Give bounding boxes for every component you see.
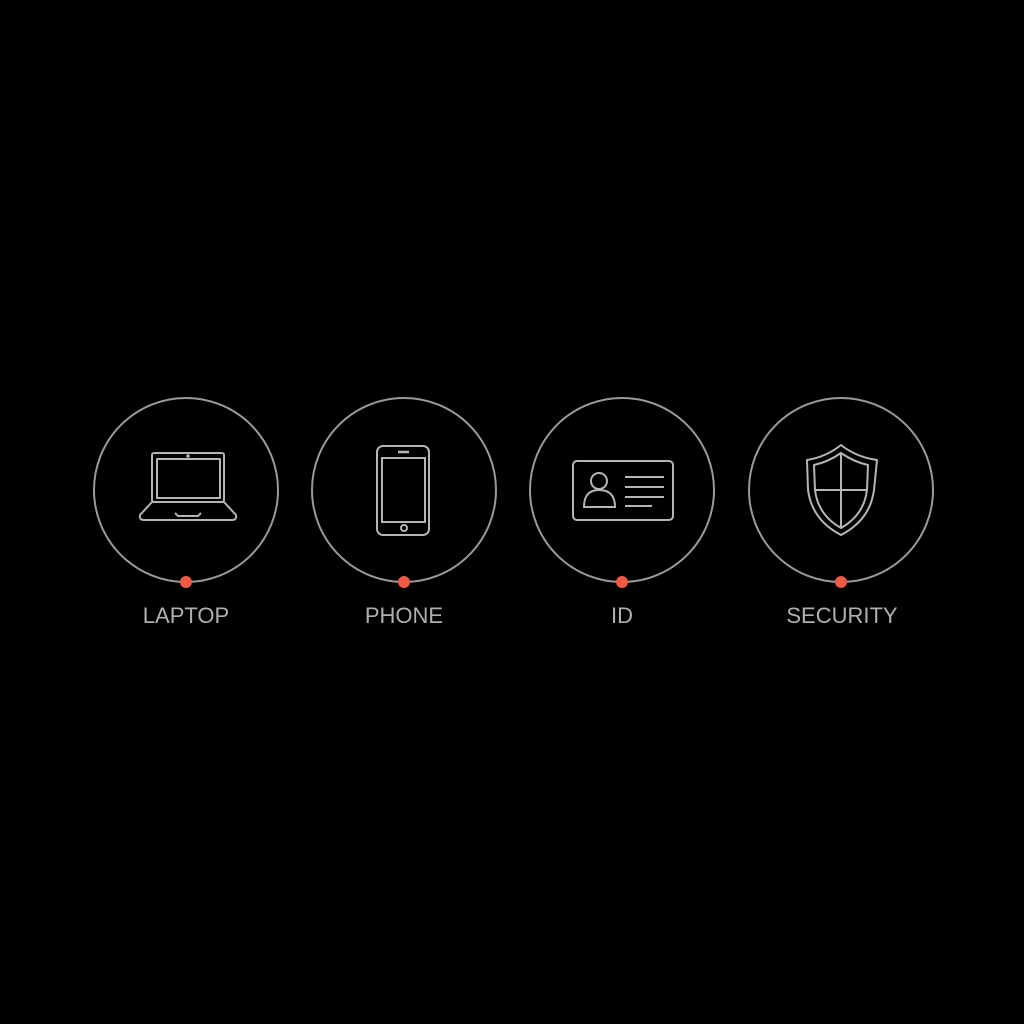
- panel: phone: [312, 398, 496, 628]
- panel: id: [530, 398, 714, 628]
- icon: laptop: [140, 453, 236, 520]
- marker dot: [398, 576, 410, 588]
- panel: laptop: [94, 398, 278, 628]
- icon: phone: [377, 446, 429, 535]
- icon: shield: [807, 445, 877, 535]
- label: PHONE: [365, 603, 443, 628]
- icon: id card: [573, 461, 673, 520]
- panel: security: [749, 398, 933, 628]
- label: LAPTOP: [143, 603, 229, 628]
- marker dot: [616, 576, 628, 588]
- label: ID: [611, 603, 633, 628]
- label: SECURITY: [786, 603, 898, 628]
- marker dot: [180, 576, 192, 588]
- marker dot: [835, 576, 847, 588]
